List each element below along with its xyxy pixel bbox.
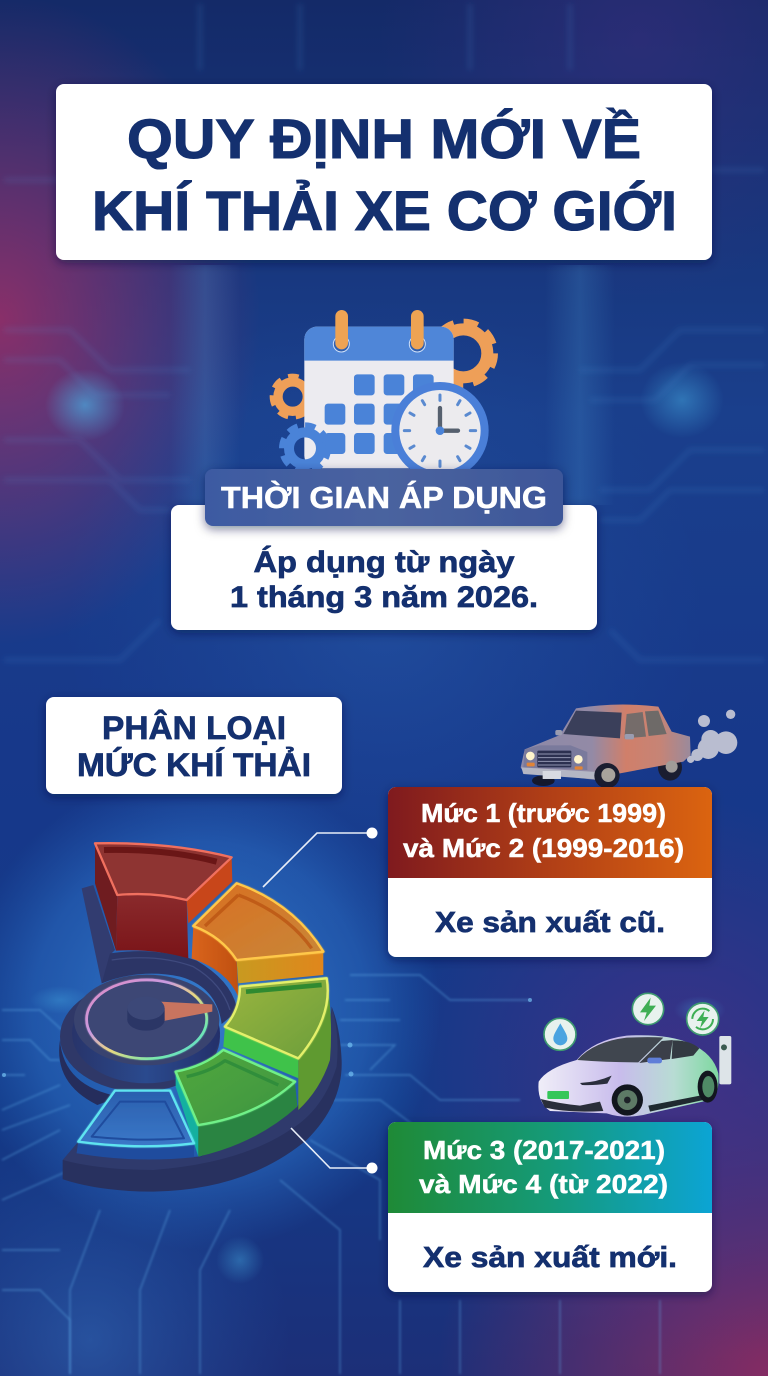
panel: application time: [171, 505, 597, 630]
level 3-4 header: và Mức 4 (từ 2022): [419, 1169, 668, 1199]
heading panel: emission classification: [46, 697, 342, 794]
gauge base: [63, 885, 342, 1192]
calendar body: [304, 310, 454, 468]
heading: application time: THỜI GIAN ÁP DỤNG: [221, 479, 547, 515]
gauge chart: [59, 843, 342, 1192]
heading panel: emission classification: PHÂN LOẠI: [102, 710, 286, 746]
gauge segment: red: [95, 843, 232, 958]
text: application date: [230, 545, 538, 614]
badge: recycling energy: [687, 1003, 719, 1035]
icon: large orange gear: [433, 323, 493, 383]
gauge segment: lime: [223, 978, 331, 1110]
level 1-2 header: [388, 787, 712, 878]
icon: old car with exhaust smoke: [521, 705, 737, 788]
level 1-2 header: và Mức 2 (1999-2016): [403, 833, 684, 863]
icon: electric car with charger and badges: [538, 993, 731, 1117]
gauge dial: [59, 975, 220, 1105]
panel: level 1 and 2: [388, 787, 712, 957]
title panel: [56, 84, 712, 260]
level 1-2 description: Xe sản xuất cũ.: [435, 907, 665, 939]
heading panel: emission classification: MỨC KHÍ THẢI: [77, 747, 311, 783]
heading: application time: [205, 469, 563, 526]
icon: calendar with clock and gears: [273, 310, 493, 479]
exhaust smoke: [687, 710, 737, 763]
icon: blue gear: [283, 426, 327, 470]
level 3-4 header: Mức 3 (2017-2021): [423, 1135, 665, 1165]
gauge segment: blue: [77, 1091, 194, 1160]
level 1-2 header: Mức 1 (trước 1999): [421, 798, 666, 828]
icon: small orange gear: [273, 377, 312, 416]
gauge segment: orange: [192, 883, 323, 997]
text: application date: Áp dụng từ ngày: [254, 545, 515, 579]
connector arrow: gauge to old vehicles: [263, 828, 378, 887]
gauge needle: [160, 1002, 212, 1022]
connector arrow: gauge to new vehicles: [291, 1128, 378, 1174]
level 3-4 header: [388, 1122, 712, 1213]
badge: lightning: [632, 993, 664, 1025]
badge: water drop: [544, 1018, 576, 1050]
panel: level 3 and 4: [388, 1122, 712, 1292]
car body: [521, 705, 691, 788]
title text: QUY ĐỊNH MỚI VỀ: [127, 107, 641, 170]
gauge segment: green: [176, 1050, 297, 1157]
car body: [538, 1035, 719, 1117]
title text: [92, 107, 677, 242]
charging station: [719, 1036, 731, 1084]
text: application date: 1 tháng 3 năm 2026.: [230, 581, 538, 614]
title text: KHÍ THẢI XE CƠ GIỚI: [92, 179, 677, 242]
icon: clock: [391, 382, 489, 479]
level 3-4 description: Xe sản xuất mới.: [423, 1242, 677, 1274]
